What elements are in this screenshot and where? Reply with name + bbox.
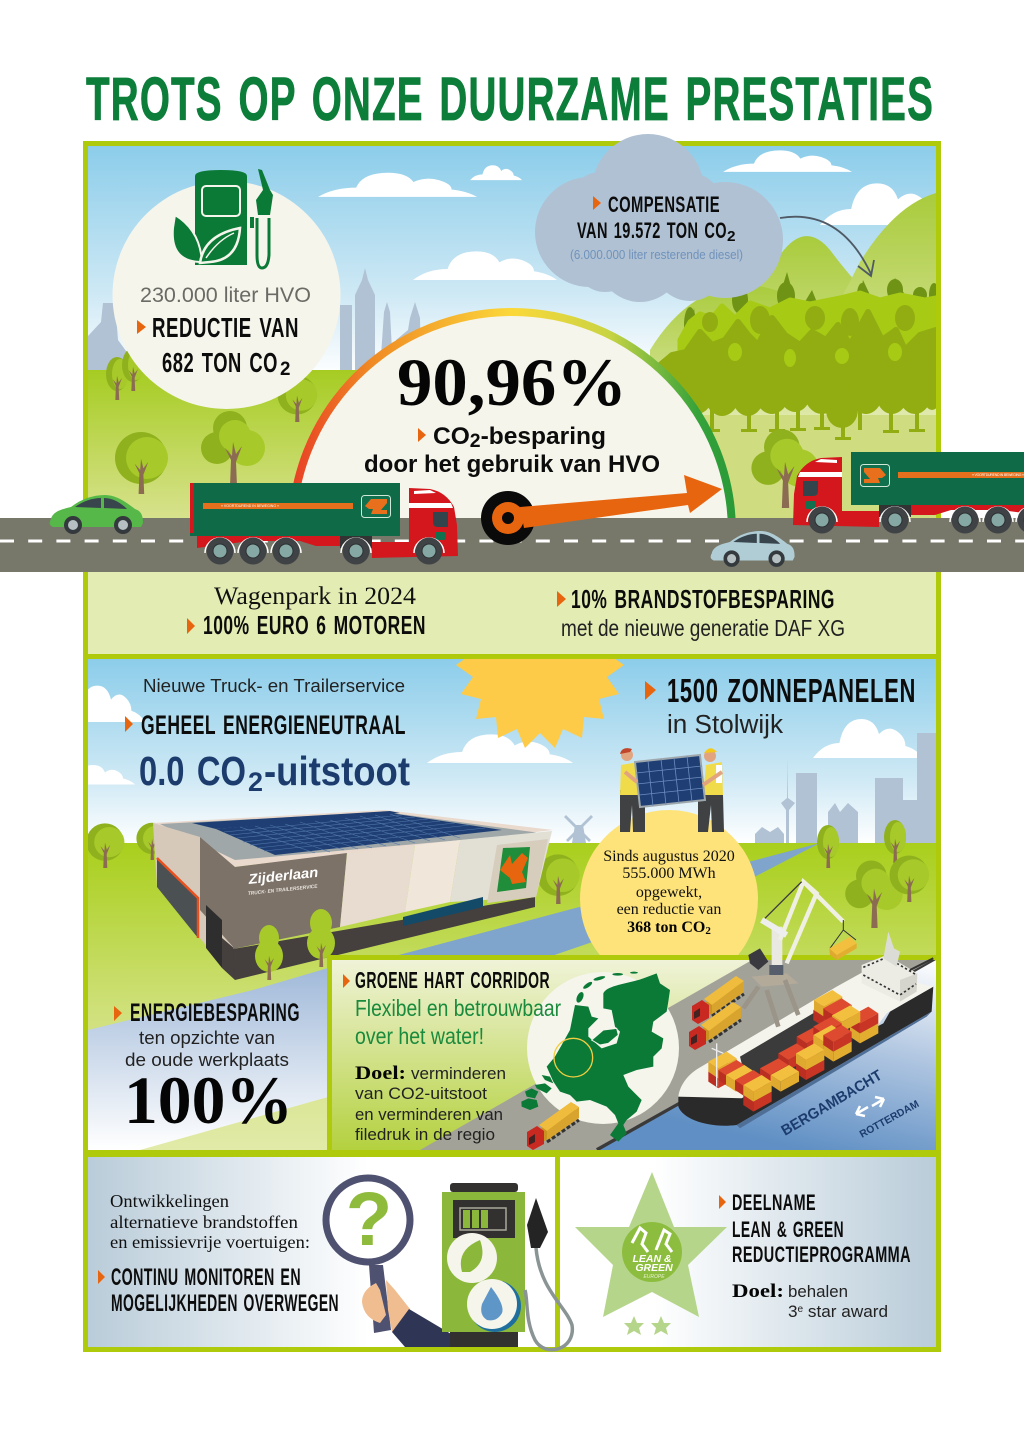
panel: energy saving: ENERGIEBESPARING [130,999,300,1027]
text: verminderen [411,1064,506,1083]
heading [125,675,410,797]
panel: Lean & Green: LEAN & GREEN [732,1217,844,1242]
heading: Nieuwe Truck- en Trailerservice [143,675,405,696]
panel: energy saving: 100% [124,1062,293,1138]
building: TRUCK- EN TRAILERSERVICE [248,884,318,897]
text: Doel: [355,1064,406,1084]
truck: left [190,483,458,564]
panel: alternative fuels: MOGELIJKHEDEN OVERWEGEN [111,1290,339,1317]
panel: Lean & Green: Doel: [732,1282,784,1302]
icon: green charging pump [442,1183,572,1350]
heading: 0.0 CO [139,748,246,794]
icon: star badge: GREEN [635,1262,673,1274]
panel: energy saving [88,968,328,1150]
text: van CO2-uitstoot [355,1084,487,1103]
arrow: cloud to forest [780,217,874,276]
route label: ROTTERDAM [858,1098,921,1141]
panel: alternative fuels: CONTINU MONITOREN EN [111,1264,301,1291]
panel: Lean & Green: star award [803,1302,888,1321]
cloud: compensation: (6.000.000 liter resterende diesel) [570,248,743,262]
text [719,1195,726,1209]
panel: alternative fuels [88,1157,572,1350]
circle: HVO reduction: 2 [280,359,291,380]
icon: workers with solar panel [620,748,724,832]
circle: HVO reduction [112,169,340,409]
heading: 2 [248,767,263,797]
icon: gauge needle arrow [481,475,722,545]
gauge text: -besparing [481,423,606,450]
gauge text: 90,96% [397,344,627,420]
panel: alternative fuels: Ontwikkelingen [110,1191,229,1211]
ground [88,843,936,1150]
circle: HVO reduction: REDUCTIE VAN [152,312,299,343]
road [0,518,1024,572]
circle: solar yield [580,810,758,955]
text: over het water! [355,1023,484,1049]
circle: solar yield: Sinds augustus 2020 [603,848,735,865]
superstructure [862,955,917,1002]
panel: Lean & Green: e [798,1304,804,1315]
river [380,843,820,960]
building: Zijderlaan [247,864,319,887]
icon: star badge [575,1172,727,1335]
text: filedruk in de regio [355,1125,495,1144]
band: fleet facts: 100% EURO 6 MOTOREN [203,610,426,640]
circle: solar yield: een reductie van [617,901,721,918]
text: Flexibel en betrouwbaar [355,995,561,1021]
circle: HVO reduction: 682 TON CO [162,347,278,378]
panel: energy neutral workshop and solar [60,653,936,1150]
icon: star badge: LEAN & [632,1253,672,1265]
gauge semicircle [292,312,732,752]
icon: green fuel pump with leaves [173,169,273,268]
panel: Lean & Green: REDUCTIEPROGRAMMA [732,1242,911,1267]
panel: Lean & Green: 3 [788,1302,797,1321]
panel: HVO road scene [88,146,950,520]
panel: green heart corridor [327,882,936,1150]
skyline [755,733,936,843]
frame and divider bars [83,141,941,1352]
band: fleet facts: Wagenpark in 2024 [214,583,417,610]
circle: solar yield: 2 [705,925,711,937]
car: blue [711,531,795,567]
text: en verminderen van [355,1105,503,1124]
heading: -uitstoot [264,748,410,794]
hills [650,193,936,430]
trees in front of building [255,909,335,980]
circle: solar yield: 555.000 MWh [622,865,716,882]
heading: solar panels [645,678,914,738]
band: fleet facts [88,572,936,654]
gauge text: 2 [470,431,481,452]
cloud: compensation: VAN 19.572 TON CO [577,218,727,243]
icon: magnifying glass with hand: ? [346,1177,392,1262]
icon: magnifying glass with hand [326,1177,473,1347]
panel: Lean & Green [560,1157,936,1347]
gauge text: CO [433,423,469,450]
map: Netherlands [521,972,670,1142]
text: 230.000 liter HVO [140,284,311,307]
gauge text [364,344,660,478]
gauge text: door het gebruik van HVO [364,451,660,478]
heading: GEHEEL ENERGIENEUTRAAL [141,710,406,740]
forest [659,272,942,440]
route label: BERGAMBACHT [778,1067,885,1139]
icon: star badge: EUROPE [643,1274,665,1280]
truck: left: « VOORTDUREND IN BEWEGING » [221,504,279,508]
circle behind map [527,972,679,1124]
circle: solar yield: 368 ton CO [627,919,705,936]
building [153,810,553,980]
water [600,960,936,1150]
cloud: compensation: 2 [727,228,736,245]
quay road [420,960,936,1150]
ship [678,932,933,1128]
cloud: compensation [535,134,783,302]
panel: energy saving: de oude werkplaats [125,1049,289,1070]
car: green [50,495,143,534]
text [343,967,561,1144]
sun [456,653,624,748]
panel: alternative fuels: en emissievrije voertuigen: [110,1232,310,1252]
windmill [564,815,593,843]
panel: Lean & Green: DEELNAME [732,1190,816,1215]
truck: right [793,452,1024,534]
panel: energy saving: ten opzichte van [139,1027,275,1048]
circle: solar yield: opgewekt, [636,884,702,901]
band: fleet facts: 10% BRANDSTOFBESPARING [571,584,835,614]
trees [106,348,819,508]
cloud: compensation: COMPENSATIE [608,192,720,217]
trees [86,820,929,928]
mini trucks [527,976,744,1150]
truck: right: « VOORTDUREND IN BEWEGING » [972,473,1024,477]
panel: Lean & Green: behalen [788,1282,848,1301]
text: GROENE HART CORRIDOR [355,967,550,993]
band: fleet facts: met de nieuwe generatie DAF XG [561,615,845,641]
panel: alternative fuels: alternatieve brandstoffen [110,1212,298,1232]
heading: solar panels: in Stolwijk [667,711,783,739]
crane [743,882,857,1027]
